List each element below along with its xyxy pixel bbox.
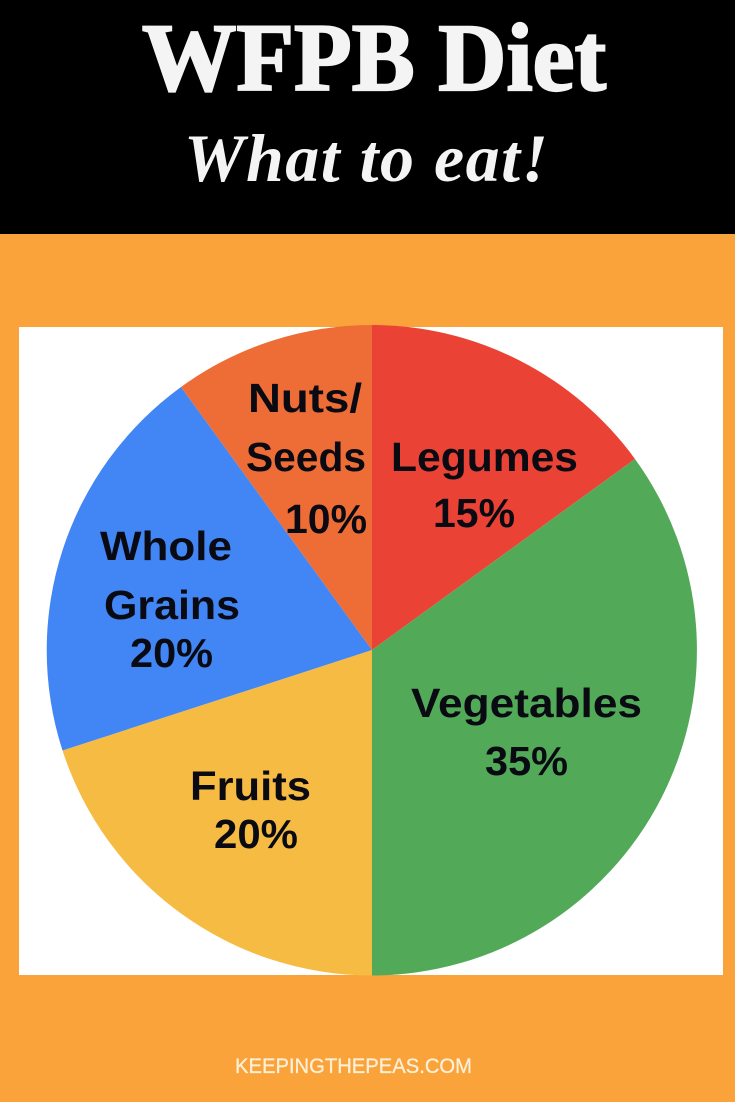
label: vegetables: 35% (485, 738, 568, 784)
label: nuts and seeds: 10% (285, 496, 367, 542)
label: whole grains: Grains (104, 582, 240, 628)
label: whole grains (100, 523, 240, 676)
panel: chart background (19, 327, 723, 975)
slice: legumes (372, 325, 635, 650)
label: whole grains: Whole (100, 523, 232, 569)
label: fruits: 20% (214, 811, 298, 857)
footer website: KEEPINGTHEPEAS.COM (235, 1054, 472, 1078)
label: nuts and seeds: Seeds (246, 434, 366, 480)
label: vegetables (411, 680, 642, 784)
label: legumes: Legumes (391, 434, 578, 480)
label: fruits: Fruits (190, 763, 311, 809)
subtitle: What to eat! (184, 120, 548, 196)
label: nuts and seeds: Nuts/ (248, 375, 362, 421)
slice: whole grains (47, 387, 372, 750)
label: legumes (391, 434, 578, 536)
slice: fruits (62, 650, 372, 976)
slice: vegetables (372, 459, 697, 976)
title: WFPB Diet (142, 4, 606, 111)
label: fruits (190, 763, 311, 857)
pie chart (47, 325, 697, 976)
label: whole grains: 20% (130, 630, 213, 676)
label: legumes: 15% (433, 490, 515, 536)
label: vegetables: Vegetables (411, 680, 642, 726)
header band (0, 0, 735, 234)
label: nuts and seeds (246, 375, 367, 542)
slice: nuts and seeds (181, 325, 372, 650)
